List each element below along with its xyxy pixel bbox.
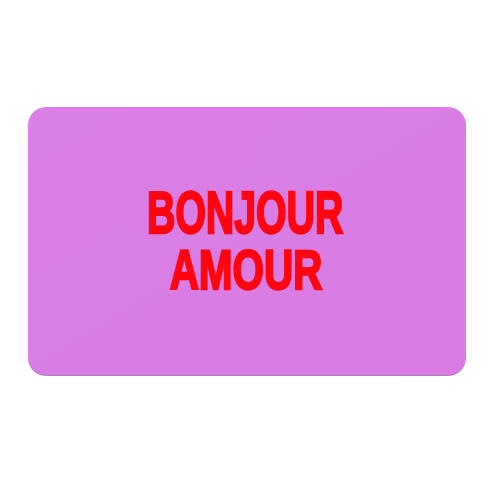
panel: pink card bbox=[28, 107, 466, 375]
title line: Amour: AMOUR bbox=[170, 238, 322, 301]
card edge bbox=[28, 108, 466, 376]
card shadow bbox=[24, 118, 454, 374]
title: Bonjour Amour bbox=[147, 180, 343, 301]
